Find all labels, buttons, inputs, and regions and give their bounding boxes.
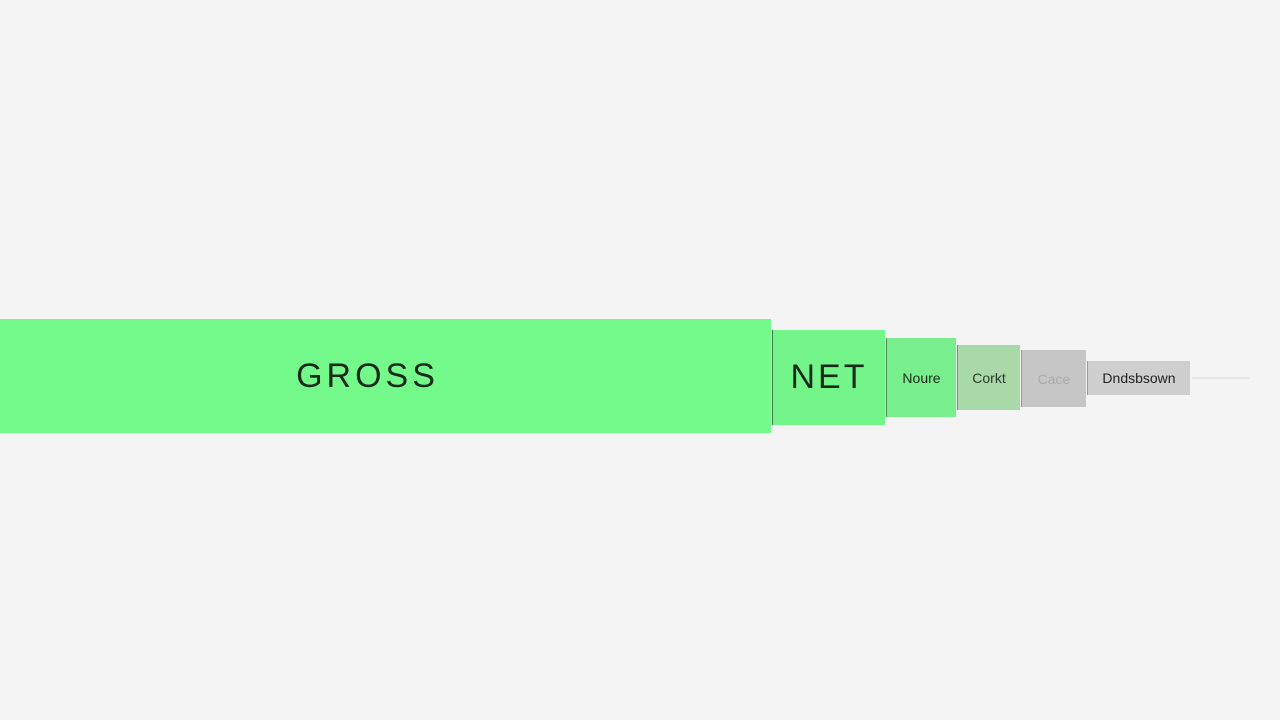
segment: Noure: Noure [902, 370, 941, 386]
segment: GROSS [0, 319, 771, 433]
segment: NET [772, 330, 885, 425]
segment: Cace: Cace [1038, 370, 1070, 386]
segment: Cace [1021, 350, 1086, 407]
segment: Corkt [957, 345, 1020, 410]
segment: Noure [886, 338, 956, 417]
segment: Dndsbsown: Dndsbsown [1102, 370, 1176, 386]
segment: NET: NET [790, 358, 868, 396]
tail line [1192, 377, 1250, 379]
segment: GROSS: GROSS [296, 356, 439, 394]
segment: Corkt: Corkt [972, 370, 1006, 386]
segment: Dndsbsown [1087, 361, 1190, 395]
bar: gross to breakdown segments [0, 319, 1250, 433]
